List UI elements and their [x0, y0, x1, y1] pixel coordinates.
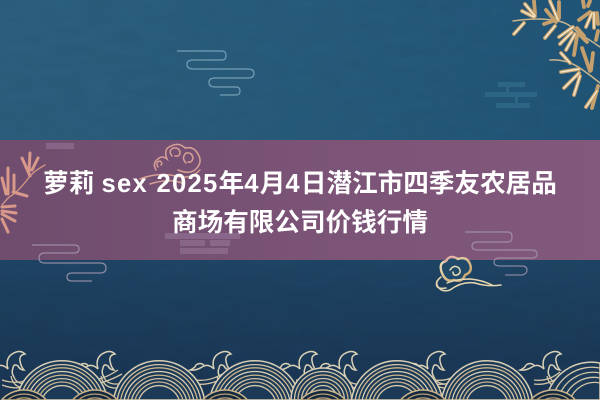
large wave arcs [16, 361, 108, 400]
auspicious cloud: gold [436, 257, 501, 291]
wave pattern [0, 352, 600, 400]
ghost seal: band [46, 143, 240, 254]
auspicious cloud: coral [140, 144, 200, 184]
wave curls [0, 352, 32, 388]
title: 商场有限公司价钱行情 [172, 209, 428, 237]
right-edge wave rings [552, 367, 600, 400]
cloud line: top left [177, 51, 254, 95]
cloud line: band lower right [465, 232, 537, 275]
title: 萝莉 sex 2025年4月4日潜江市四季友农居品 [43, 170, 557, 198]
ghost seal: top right [485, 82, 537, 108]
bamboo leaf highlights [514, 1, 597, 107]
small front wave arcs [2, 390, 46, 400]
title [43, 170, 557, 237]
bamboo stems [513, 19, 600, 83]
wave foam lines [2, 370, 560, 388]
right-edge wave arc [546, 362, 600, 400]
bamboo leaves [514, 1, 598, 108]
cloud line: band lower left [32, 245, 106, 281]
bamboo: top right [513, 1, 600, 108]
band [0, 140, 600, 260]
bamboo: left coral [2, 153, 45, 232]
